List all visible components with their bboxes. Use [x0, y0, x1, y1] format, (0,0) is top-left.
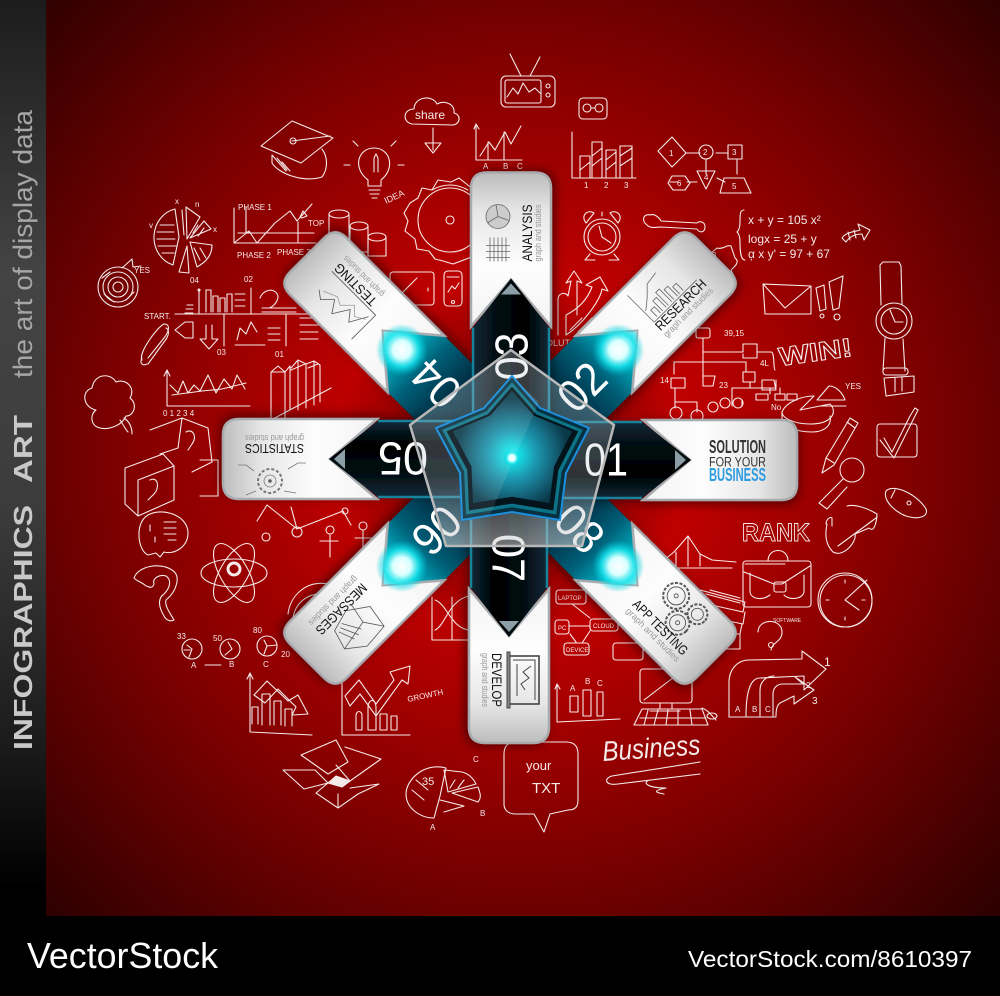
doodle: flowchart: 1 — [669, 149, 674, 158]
doodle: pie 3d: A — [430, 823, 436, 832]
doodle: growth chart: GROWTH — [407, 688, 444, 704]
doodle: bar chart: 1 — [584, 181, 589, 190]
doodle: graduation cap — [261, 121, 333, 179]
doodle: timeline: 03 — [217, 348, 226, 357]
doodle: text OUT: OLUT — [546, 338, 571, 348]
label: business: BUSINESS — [709, 465, 766, 485]
card 03: analysis — [471, 172, 551, 430]
doodle: multi arrow: 2 — [806, 681, 811, 690]
card 01: solution — [540, 420, 797, 500]
doodle: wrench — [644, 214, 705, 232]
card 05: statistics — [223, 419, 480, 499]
doodle: flowchart: 3 — [732, 148, 737, 157]
sublabel: graph and studies — [480, 653, 490, 707]
doodle: wave chart — [163, 370, 250, 418]
doodle: wifi swirl — [288, 583, 328, 620]
doodle: three small pies: 33 — [177, 632, 186, 641]
doodle: business script: Business — [601, 729, 701, 767]
doodle: tv — [501, 54, 555, 107]
doodle: pie 3d — [406, 755, 485, 832]
doodle: bar chart: 3 — [624, 181, 629, 190]
doodle: flowchart — [658, 137, 751, 193]
doodle: cloud flowchart: LAPTOP — [558, 596, 582, 602]
doodle: three small pies — [177, 626, 290, 670]
doodle: ABC bars: C — [597, 679, 603, 688]
doodle: cylinders — [329, 210, 386, 256]
doodle: wristwatch — [876, 262, 914, 396]
sublabel: graph and studies — [533, 204, 543, 262]
central glass pentagon — [410, 350, 614, 546]
doodle: org tree: 14 — [660, 376, 669, 385]
doodle: phase chart — [234, 203, 324, 260]
doodle: gear — [404, 178, 482, 264]
sidebar title — [8, 415, 38, 750]
doodle: phone — [444, 271, 462, 306]
doodle: phase chart: TOP — [308, 219, 324, 228]
doodle: pie chart — [149, 197, 217, 273]
doodle: paperclip — [141, 324, 168, 365]
doodle: timeline: 02 — [244, 275, 253, 284]
sublabel: graph and studies — [624, 606, 682, 664]
doodle: pie 3d: B — [480, 809, 485, 818]
doodle: three small pies: C — [263, 660, 269, 669]
doodle: flowchart: 5 — [732, 182, 737, 191]
doodle: open box — [283, 740, 381, 808]
sidebar — [0, 0, 46, 916]
doodle: flowchart: 6 — [677, 179, 682, 188]
number 04: 04 — [401, 348, 471, 419]
doodle: network and figures — [257, 505, 373, 557]
footer image id: VectorStock.com/8610397 — [688, 946, 972, 972]
doodle layer — [85, 54, 927, 832]
doodle: tablet — [390, 272, 434, 305]
doodle: down chart — [247, 673, 312, 735]
doodle: three small pies: 80 — [253, 626, 262, 635]
doodle: multi arrow: 3 — [812, 696, 818, 707]
doodle: multi arrow: B — [752, 705, 757, 714]
doodle: note speech box — [504, 742, 578, 832]
doodle: glasses box — [579, 98, 607, 119]
number 05: 05 — [378, 432, 428, 484]
doodle: curved arrow — [842, 224, 870, 242]
sublabel: graph and studies — [341, 253, 386, 299]
doodle: org tree: 39,15 — [724, 329, 745, 338]
label: for your: FOR YOUR — [709, 454, 766, 470]
doodle: light bulb: IDEA — [383, 188, 406, 206]
doodle: org tree: 4L — [760, 359, 769, 368]
card 07: develop — [469, 486, 549, 743]
doodle: rising arrows — [558, 271, 608, 335]
label: research: RESEARCH — [652, 276, 709, 334]
doodle: bar chart: 2 — [604, 181, 609, 190]
doodle: three small pies: B — [229, 660, 234, 669]
doodle: atom — [201, 537, 267, 609]
doodle: pie chart: x — [213, 225, 217, 234]
icon: blueprint board — [507, 652, 539, 708]
doodle: three small pies: 50 — [213, 634, 222, 643]
doodle: magnifier — [819, 458, 864, 509]
doodle: big three — [134, 566, 177, 621]
doodle: cloud — [85, 376, 134, 434]
doodle: org tree: 23 — [719, 381, 728, 390]
doodle: ABC bars: A — [570, 684, 576, 693]
number 07: 07 — [482, 534, 534, 582]
doodle: question mark: SOFTWARE — [773, 618, 802, 624]
doodle: ABC bars: B — [585, 677, 590, 686]
label: solution: SOLUTION — [709, 437, 766, 457]
doodle: multi arrow: C — [765, 705, 771, 714]
doodle: line chart ABC: A — [483, 162, 489, 171]
doodle: phase chart: PHASE 3 — [277, 248, 311, 257]
doodle: mouse — [885, 488, 927, 518]
doodle: pie with yes no: No — [771, 403, 782, 412]
doodle: three small pies: A — [191, 661, 197, 670]
doodle: timeline: START. — [144, 312, 171, 321]
number 06: 06 — [401, 495, 472, 566]
doodle: share cloud: share — [415, 108, 445, 122]
doodle: sine chart — [432, 596, 472, 640]
doodle: line chart ABC: B — [503, 162, 508, 171]
doodle: phase chart: PHASE 2 — [237, 251, 271, 260]
doodle: pie chart: v — [149, 221, 153, 230]
doodle: pie 3d: C — [473, 755, 479, 764]
number 02: 02 — [546, 352, 617, 422]
doodle: blocks — [125, 418, 218, 516]
doodle: org tree — [660, 328, 797, 422]
doodle: light bulb — [344, 141, 406, 206]
label: statistics: STATISTICS — [245, 441, 304, 456]
number 01: 01 — [584, 434, 628, 486]
doodle: checkbox — [877, 408, 918, 458]
doodle: pie chart: n — [195, 200, 199, 209]
doodle: pie with yes no: YES — [845, 382, 861, 391]
label: analysis: ANALYSIS — [520, 204, 535, 262]
sidebar title: ART — [8, 415, 38, 483]
doodle: timeline: 01 — [275, 350, 284, 359]
doodle: pie with yes no — [771, 382, 861, 432]
doodle: speech bubble — [139, 512, 188, 557]
central shadow — [335, 283, 685, 633]
doodle: exclamations — [816, 276, 843, 320]
doodle: puzzle: 3 — [712, 251, 717, 260]
central star — [436, 376, 589, 520]
number 08: 08 — [544, 493, 615, 564]
doodle: cloud flowchart — [555, 590, 643, 660]
doodle: cloud flowchart: PC — [558, 626, 567, 632]
footer brand: VectorStock — [27, 935, 219, 976]
doodle: growth chart — [342, 666, 444, 735]
doodle: multi arrow: 1 — [824, 655, 831, 669]
doodle: spiral target: YES — [134, 266, 150, 275]
doodle: 3d bars — [271, 360, 331, 420]
doodle: WIN: WIN! — [777, 332, 854, 372]
number 03: 03 — [486, 332, 538, 380]
doodle: multi arrow: A — [735, 705, 741, 714]
footer band — [0, 916, 1000, 996]
doodle: briefcase — [743, 550, 811, 607]
icon: line graph — [308, 271, 376, 339]
icon: gears — [646, 578, 712, 644]
doodle: computer and keyboard — [634, 669, 717, 725]
doodle: RANK: RANK — [742, 519, 810, 547]
doodle: flowchart: 4 — [704, 173, 709, 182]
doodle: business script — [601, 729, 701, 794]
doodle: note speech box: TXT — [532, 780, 560, 797]
doodle: wave chart: 0 1 2 3 4 — [163, 409, 195, 418]
doodle: pie chart: x — [175, 197, 179, 206]
doodle: formulas: ᾳ x y' = 97 + 67 — [748, 247, 830, 261]
doodle: bar chart — [572, 132, 636, 190]
doodle: phase chart: PHASE 1 — [238, 203, 272, 212]
doodle: formulas: x + y = 105 x² — [748, 213, 821, 227]
doodle: spiral target — [98, 259, 150, 307]
doodle: three small pies: 20 — [281, 650, 290, 659]
doodle: note speech box: your — [526, 758, 552, 773]
sidebar tagline: the art of display data — [8, 109, 38, 378]
doodle: puzzle — [705, 246, 737, 298]
sidebar title: INFOGRAPHICS — [8, 505, 38, 750]
sublabel: graph and studies — [306, 574, 360, 628]
card 08: app testing — [503, 451, 741, 689]
doodle: flowchart: 2 — [703, 148, 708, 157]
doodle: alarm clock — [584, 212, 620, 260]
doodle: line chart ABC: C — [517, 162, 523, 171]
card 06: messages — [279, 451, 517, 689]
doodle: timeline: 04 — [190, 276, 199, 285]
doodle: wall clock — [818, 573, 872, 627]
card 04: testing — [279, 227, 517, 465]
doodle: formulas: logx = 25 + y — [748, 232, 817, 246]
doodle: line chart ABC — [474, 124, 523, 171]
label: messages: MESSAGES — [313, 580, 370, 638]
doodle: cloud flowchart: CLOUD — [593, 624, 615, 630]
doodle: cloud flowchart: DEVICE — [566, 648, 588, 654]
doodle: question mark — [758, 618, 802, 650]
icon: pie and bars — [486, 204, 510, 262]
label: testing: TESTING — [331, 260, 380, 309]
doodle: paper stack — [698, 590, 745, 649]
doodle: pie 3d: 35 — [422, 776, 434, 788]
doodle: share cloud — [405, 98, 459, 153]
doodle: goggles — [826, 505, 877, 553]
doodle: pencil — [822, 418, 858, 473]
label: app testing: APP TESTING — [630, 597, 691, 658]
icon: rising chart — [627, 253, 697, 322]
doodle: timeline — [144, 275, 325, 359]
doodle: formulas — [737, 210, 830, 261]
icon: envelope shield — [326, 597, 388, 659]
doodle: multi arrow — [729, 651, 831, 717]
label: develop: DEVELOP — [489, 653, 504, 707]
doodle: ABC bars — [555, 677, 620, 722]
sublabel: graph and studies — [661, 285, 715, 339]
icon: gear diagram — [238, 463, 306, 495]
sublabel: graph and studies — [245, 433, 304, 443]
doodle: envelope — [763, 284, 811, 314]
card 02: research — [503, 227, 741, 465]
doodle: peak chart — [662, 536, 736, 568]
